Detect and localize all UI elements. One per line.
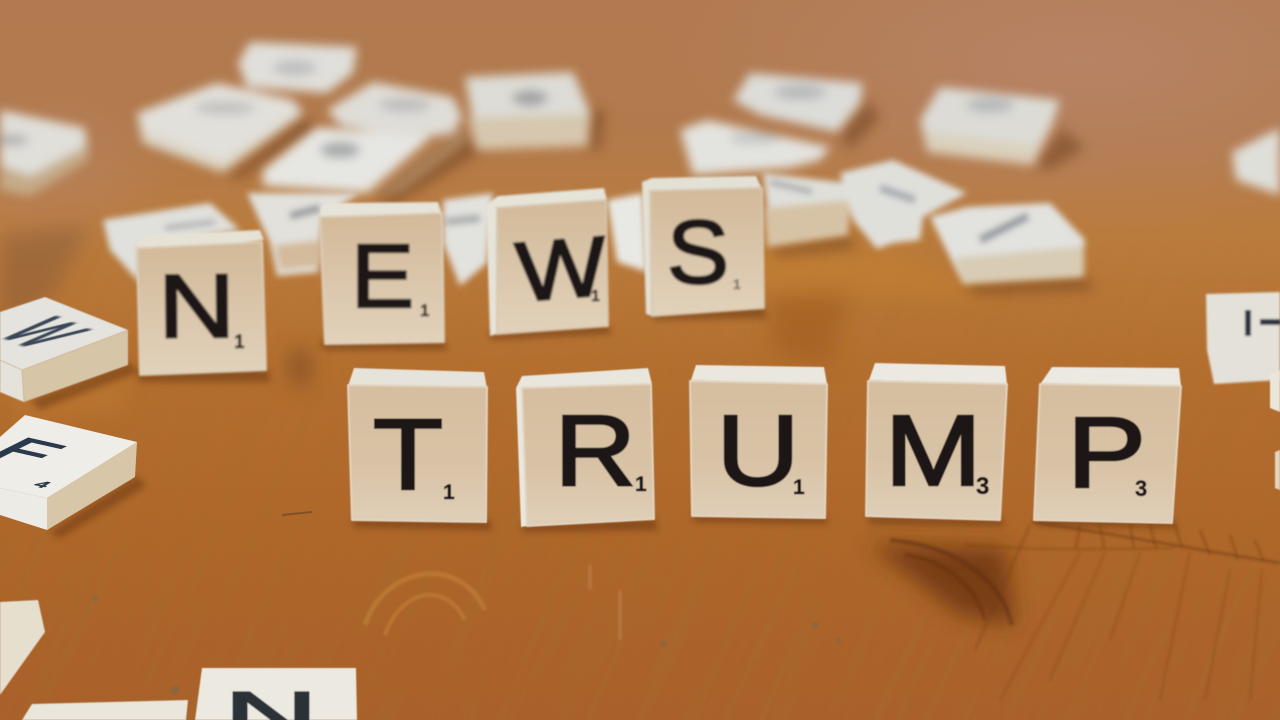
tile: P: P	[1067, 397, 1146, 509]
tile: S (news): 1	[733, 276, 741, 292]
tile: E (news): E	[351, 227, 414, 327]
tile: right edge slivers	[1270, 370, 1280, 490]
tile: W (news): 1	[591, 288, 600, 305]
tile: M: M	[885, 395, 982, 507]
tile: bottom left corner	[0, 600, 45, 695]
tile: T	[348, 368, 487, 522]
tile: E (news): 1	[420, 301, 429, 320]
tile: U: 1	[793, 476, 805, 499]
tile: N (news): 1	[234, 332, 245, 353]
tile: R: R	[554, 395, 636, 507]
tile: bottom N	[195, 668, 357, 720]
tile: left F tile: 4	[29, 479, 56, 490]
tile: T: 1	[443, 481, 455, 504]
tile: W (news): W	[513, 219, 610, 319]
tile: R	[516, 368, 654, 527]
tile: left F tile	[0, 415, 137, 530]
shadows under foreground tiles	[30, 306, 1177, 538]
blurred tiles: back row	[0, 42, 1280, 198]
tile: M	[866, 363, 1007, 520]
tile: R: 1	[635, 473, 647, 496]
blurred tiles: middle row	[103, 160, 1085, 286]
tile: M: 3	[976, 473, 989, 500]
tile: W (news)	[486, 188, 610, 336]
tile: S (news): S	[667, 203, 729, 303]
tile: U	[690, 365, 827, 518]
tile: bottom partial	[22, 700, 188, 720]
tile: N (news): N	[158, 257, 235, 357]
tile: U: U	[716, 395, 800, 507]
tile: T: T	[373, 399, 443, 511]
tile: P	[1034, 367, 1181, 523]
tile: right partial H	[1206, 292, 1280, 384]
tile: N (news)	[137, 230, 266, 375]
soft shadows under blurred tiles	[228, 100, 1092, 294]
tile: S (news)	[642, 176, 764, 316]
tile: left W tile	[0, 297, 128, 402]
tile: E (news)	[320, 202, 444, 344]
tile: P: 3	[1135, 476, 1147, 501]
